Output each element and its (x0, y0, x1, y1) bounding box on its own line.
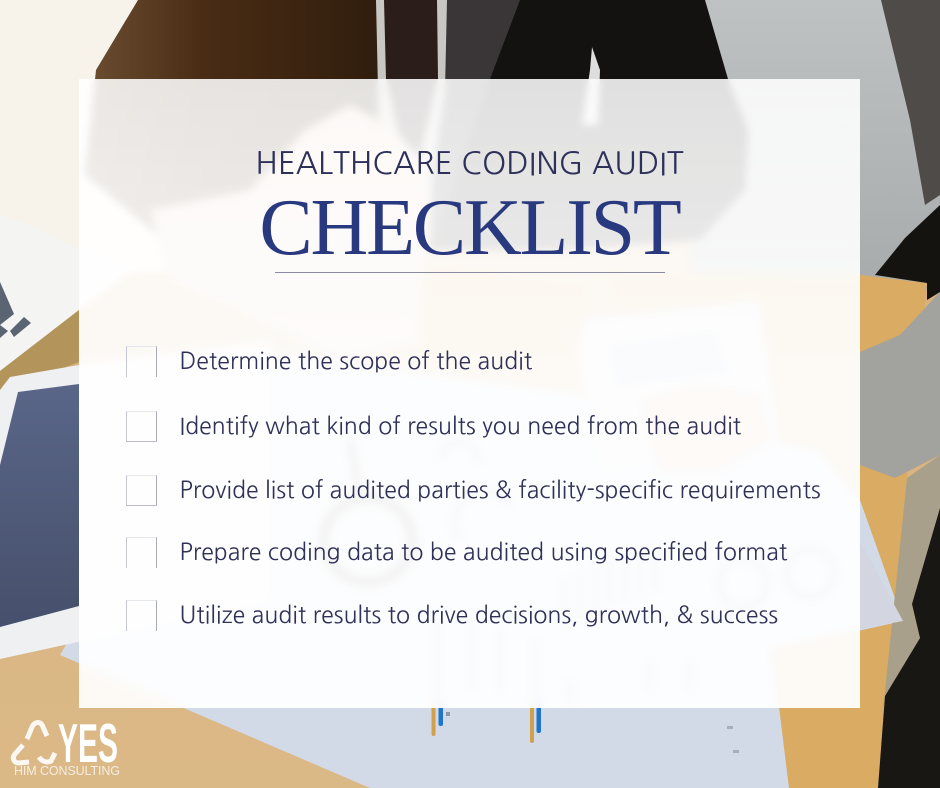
white translucent content panel (79, 79, 860, 708)
orange and blue bars (432, 700, 436, 736)
shirt (376, 0, 447, 230)
paper sheets (60, 350, 903, 788)
bars at bottom (437, 620, 690, 705)
heading: kicker: HEALTHCARE CODING AUDIT (255, 149, 684, 179)
bars on paper (565, 545, 655, 625)
tablet (0, 342, 270, 659)
tablet screen (0, 384, 79, 627)
heading: checklist: CHECKLIST (259, 184, 680, 272)
light table top left (0, 0, 175, 273)
wood under laptop (0, 310, 79, 392)
checklist item 2: Identify what kind of results you need from the audit (180, 415, 741, 438)
magnifier (324, 440, 412, 582)
tie (384, 0, 438, 190)
wall (690, 0, 940, 290)
logo tagline: HIM CONSULTING (14, 764, 120, 778)
hands (150, 105, 430, 360)
checklist item 3: Provide list of audited parties & facility-specific requirements (180, 479, 821, 502)
logo: YES HIM Consulting (10, 716, 120, 778)
lines on chart (610, 337, 728, 382)
checklist item 4: Prepare coding data to be audited using specified format (180, 541, 787, 564)
laptop (0, 214, 130, 371)
jacket right (430, 0, 748, 250)
jacket left (85, 0, 420, 262)
lapel (430, 0, 520, 250)
checklist item 2 (126, 411, 741, 442)
icon: recycling triangle (13, 722, 55, 763)
wood wedge below jacket (420, 265, 590, 390)
checklist item 5: Utilize audit results to drive decisions, growth, & success (180, 604, 778, 627)
checklist item 1 (126, 346, 532, 377)
paper with chart (570, 300, 780, 470)
checklist item 5 (126, 600, 778, 631)
sleeve and suit right (881, 0, 940, 205)
checklist item 1: Determine the scope of the audit (180, 350, 532, 373)
paper tip on right (860, 541, 903, 629)
sliver (582, 47, 600, 125)
wood table right (600, 272, 927, 788)
checklist item 3 (126, 475, 821, 506)
checklist item 4 (126, 537, 788, 568)
